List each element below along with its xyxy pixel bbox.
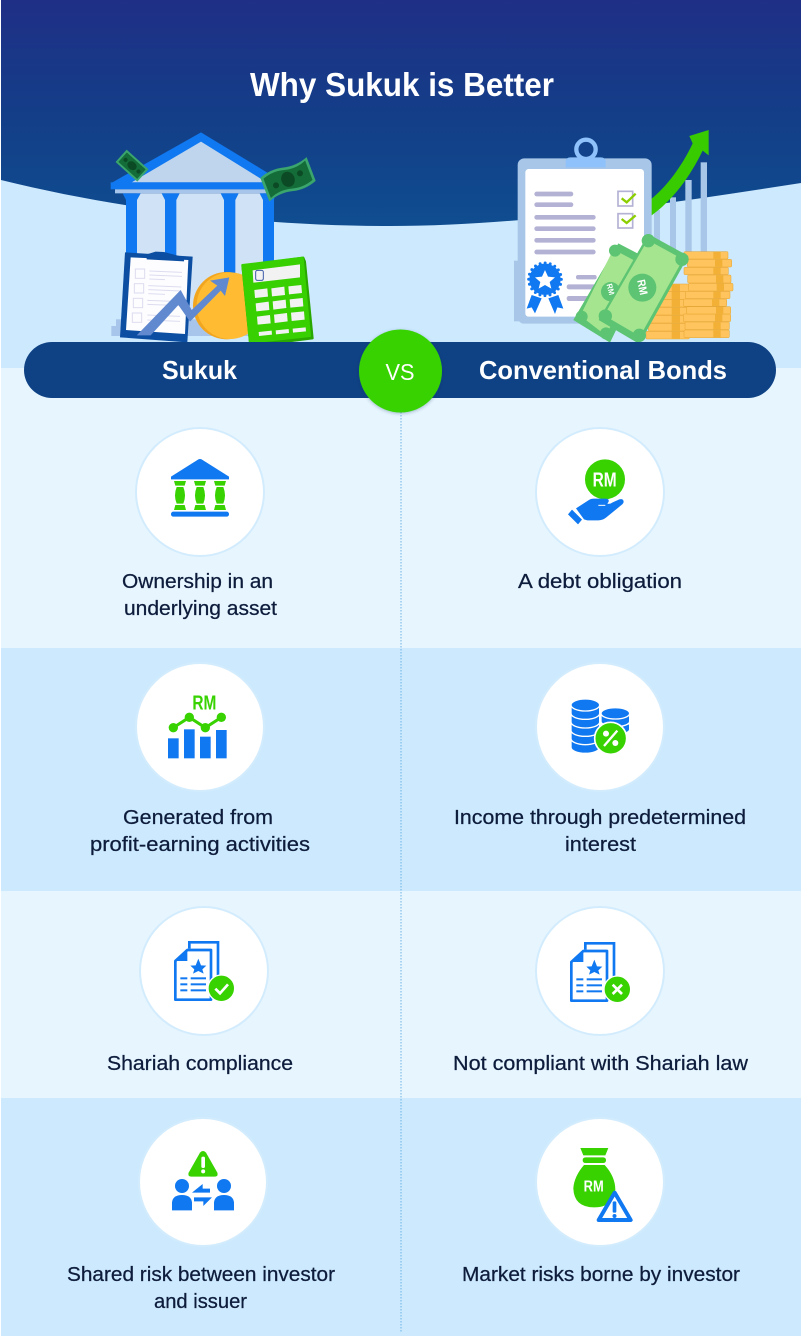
text: shariah compliance: Shariah compliance: [107, 1053, 293, 1075]
text: profit: Generated from: [123, 807, 273, 829]
icon: RM bar chart: [168, 693, 227, 758]
illustration: bank, clipboard, coin and calculator: [111, 132, 317, 346]
row 1 left: ownership: underlying asset: [124, 598, 277, 620]
icon: document with check: [175, 942, 235, 1002]
comparison header bar: [24, 330, 776, 412]
text: debt: A debt obligation: [518, 571, 682, 593]
title: Why Sukuk is Better: [250, 66, 554, 103]
text: shared risk: Shared risk between investor: [67, 1264, 335, 1286]
icon: hand with RM coin: RM: [593, 469, 617, 492]
row 4 right: market risk: [462, 1118, 740, 1286]
row 2 left: profit: [90, 663, 310, 856]
row 3 left: shariah compliance: [107, 907, 293, 1075]
illustration: clipboard, growth arrow, bills and coin stacks: RM: [634, 279, 649, 296]
row 2 right: interest: [454, 663, 746, 856]
vs badge: VS: [386, 359, 414, 385]
row 1 left: ownership: [122, 428, 277, 620]
icon: hand with RM coin: [568, 459, 625, 524]
icon: two people with warning: [172, 1151, 234, 1210]
text: ownership: Ownership in an: [122, 571, 273, 593]
heading: Conventional Bonds: Conventional Bonds: [479, 355, 727, 385]
icon: coin stacks with percent: [571, 699, 630, 754]
text: market risk: Market risks borne by investor: [462, 1264, 740, 1286]
icon: bank building: [171, 459, 229, 517]
row 3 right: not compliant: [453, 907, 749, 1075]
illustration: clipboard, growth arrow, bills and coin stacks: RM: [605, 283, 616, 296]
row backgrounds: [1, 368, 801, 1336]
row 2 left: profit: profit-earning activities: [90, 834, 310, 856]
icon: RM bar chart: RM: [192, 693, 216, 715]
heading: Sukuk: Sukuk: [162, 355, 238, 385]
header background: [1, 0, 801, 370]
vs badge: [359, 330, 442, 412]
text: interest: Income through predetermined: [454, 807, 746, 829]
row 2 right: interest: interest: [565, 834, 636, 856]
icon: money bag with warning: [573, 1148, 631, 1220]
text: not compliant: Not compliant with Shariah law: [453, 1053, 749, 1075]
icon: document with cross: [571, 943, 631, 1003]
row 4 left: shared risk: [67, 1118, 335, 1313]
icon: money bag with warning: RM: [584, 1179, 604, 1196]
illustration: clipboard, growth arrow, bills and coin stacks: [514, 130, 733, 344]
row 1 right: debt: [518, 428, 682, 593]
row 4 left: shared risk: and issuer: [154, 1291, 247, 1313]
